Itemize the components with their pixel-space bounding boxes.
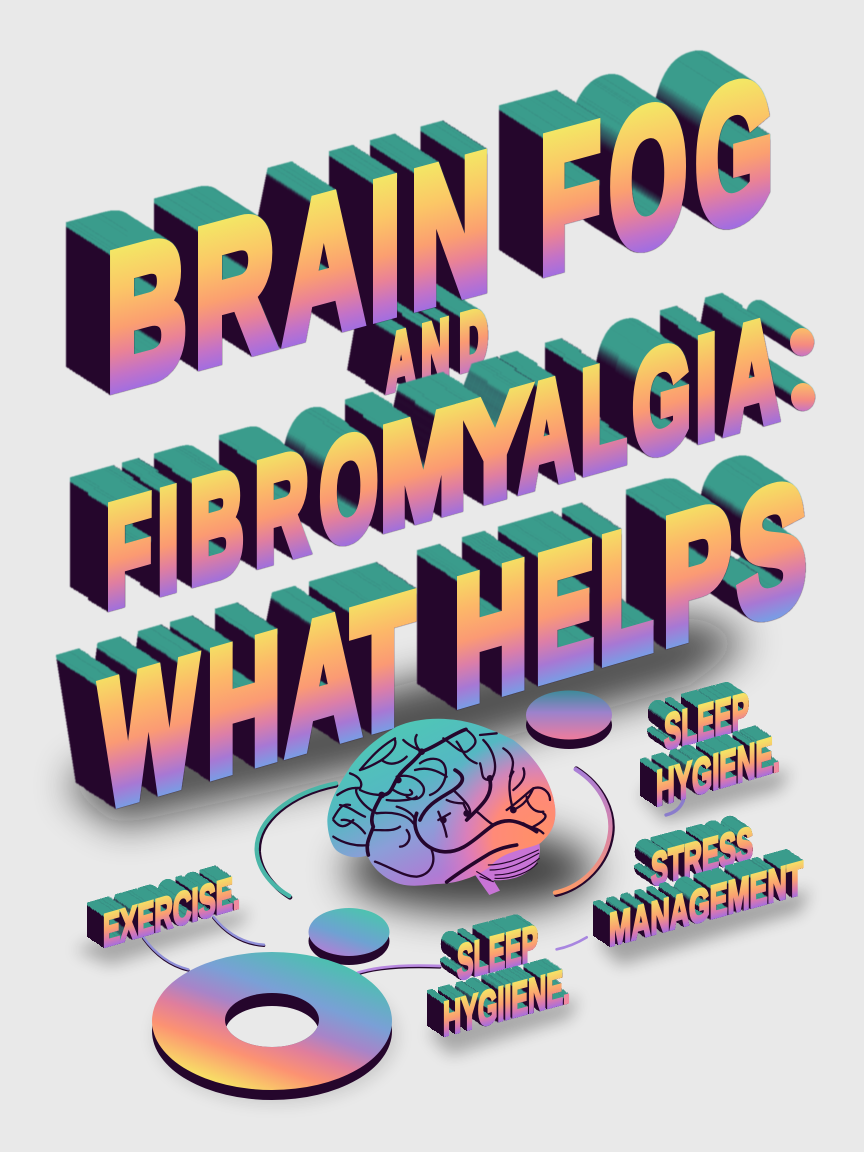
connector: under upper hygiene label bbox=[666, 801, 683, 815]
title line: FIBROMYALGIA: ALGIA bbox=[520, 289, 778, 521]
ground shadow: title and brain bbox=[70, 615, 810, 1104]
brain: warm colour overlay bbox=[327, 719, 555, 886]
title line: BRAIN FOG: FOG bbox=[540, 39, 773, 313]
title line: FIBROMYALGIA: MY bbox=[381, 358, 529, 559]
label: EXERCISE.: EXERCISE. bbox=[103, 865, 240, 957]
ring: large donut bbox=[152, 952, 392, 1100]
title line: FIBROMYALGIA bbox=[106, 289, 778, 638]
disc: middle small bbox=[308, 908, 390, 965]
arc: left teal around brain bbox=[257, 783, 336, 897]
title line: WHAT HELPS bbox=[101, 446, 805, 844]
title line: FIBROMYALGIA: FIBRO bbox=[106, 403, 377, 638]
title line: WHAT HELPS: PS bbox=[663, 446, 805, 681]
disc: upper small bbox=[526, 690, 612, 749]
icon: brain bbox=[327, 719, 555, 895]
label: SLEEP (lower): SLEEP bbox=[457, 915, 538, 991]
brain: sulci folds bbox=[333, 729, 550, 882]
title line: WHAT HELPS: WHAT H bbox=[101, 526, 527, 844]
brain: cerebellum and stem bbox=[473, 843, 540, 895]
title: Brain Fog and Fibromyalgia: What Helps bbox=[101, 39, 815, 844]
title colon: dots bbox=[790, 328, 815, 411]
title line: WHAT HELPS: EL bbox=[536, 489, 653, 718]
label: HYGIIENE. (lower): HYGIIENE. bbox=[443, 959, 570, 1047]
brain: cerebrum bbox=[327, 719, 555, 886]
label: STRESS: STRESS bbox=[651, 817, 753, 896]
arc: right purple to orange around brain bbox=[555, 769, 612, 895]
title word: AND: AND bbox=[387, 293, 488, 408]
connector lines bbox=[143, 917, 587, 975]
title line: BRAIN FOG: BRAIN bbox=[107, 114, 490, 430]
label: SLEEP (upper right): SLEEP bbox=[664, 682, 749, 761]
title line: BRAIN FOG bbox=[107, 39, 773, 430]
